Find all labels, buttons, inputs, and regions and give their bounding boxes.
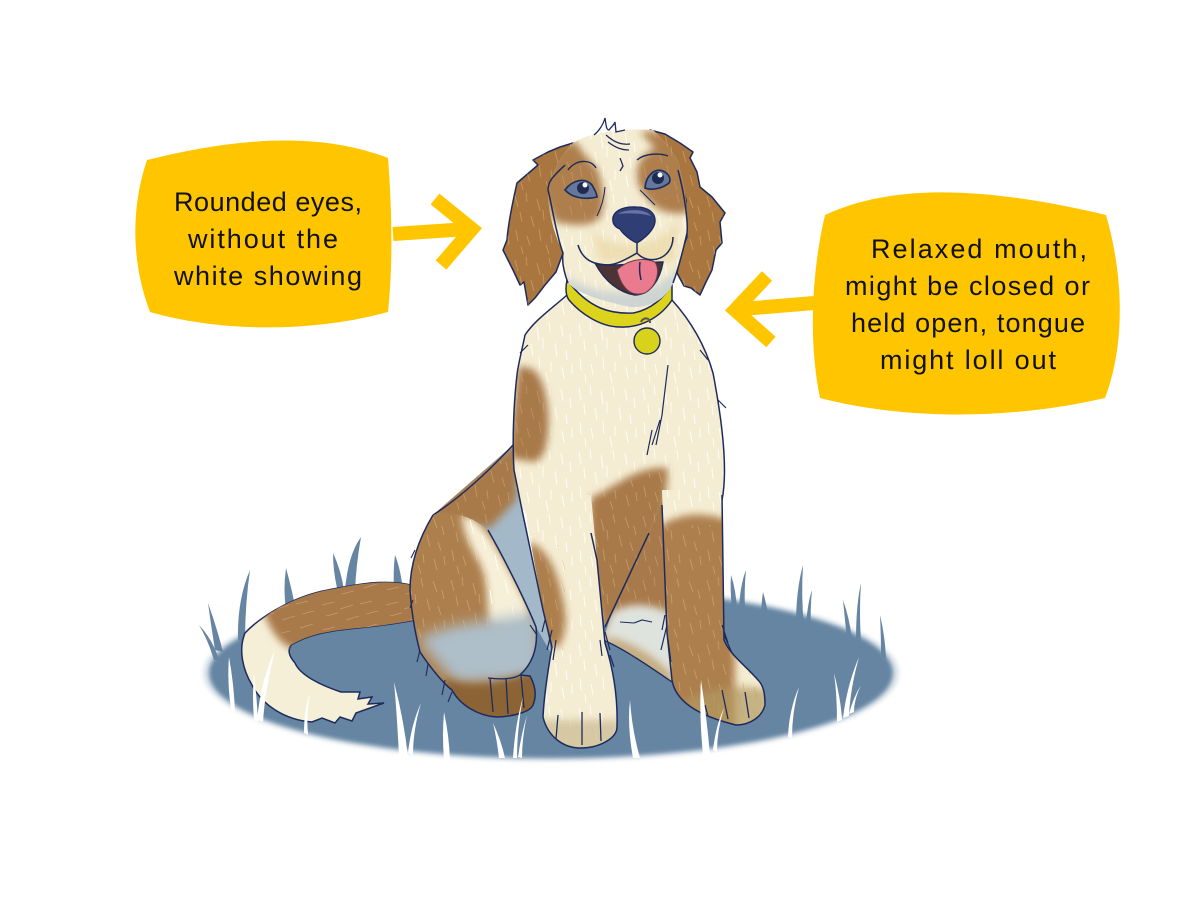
callout text right	[845, 234, 1090, 375]
arrow: to mouth	[735, 276, 814, 342]
callout text right: might loll out	[880, 345, 1056, 375]
mouth	[578, 237, 673, 295]
dog body back shade	[425, 440, 552, 655]
head tuft	[594, 118, 630, 171]
dog collar tag	[634, 318, 660, 354]
dog right ear	[650, 130, 725, 295]
callout text left: without the	[187, 224, 338, 254]
white grass blades	[228, 650, 861, 760]
panel: grass shadow ellipse	[203, 585, 899, 761]
dog far hind leg	[604, 500, 672, 682]
callout text right: Relaxed mouth,	[871, 234, 1087, 264]
dog illustration	[242, 118, 775, 755]
shoulder patch	[508, 367, 548, 462]
dog left ear	[503, 143, 575, 305]
infographic	[135, 118, 1120, 763]
dog head	[547, 118, 688, 308]
callout text right: held open, tongue	[851, 308, 1085, 338]
tongue	[617, 260, 658, 294]
callout text right: might be closed or	[845, 271, 1090, 301]
dog chest fur lines	[520, 345, 726, 455]
dog tail	[242, 570, 420, 723]
brow lines	[568, 154, 668, 170]
callout text left	[173, 187, 362, 291]
chest patch	[590, 468, 668, 640]
haunch light patch	[462, 515, 529, 628]
dog collar	[566, 280, 672, 327]
arrow: to eyes	[393, 199, 472, 265]
right eye patch	[637, 131, 695, 214]
callout shape right	[813, 192, 1120, 414]
right eye	[645, 170, 670, 189]
callout text left: Rounded eyes,	[174, 187, 362, 217]
nose	[613, 207, 655, 243]
dog haunch	[405, 505, 540, 720]
head outline	[548, 165, 568, 283]
blue grass blades	[199, 537, 886, 660]
callout: relaxed mouth	[813, 192, 1120, 414]
left eye	[565, 180, 597, 198]
callout shape left	[135, 141, 391, 327]
dog torso	[512, 295, 726, 628]
callout text left: white showing	[173, 261, 362, 291]
callout: rounded eyes	[135, 141, 391, 327]
dog main front leg	[520, 490, 620, 755]
dog near front leg	[660, 490, 766, 726]
left eye patch	[540, 140, 604, 225]
